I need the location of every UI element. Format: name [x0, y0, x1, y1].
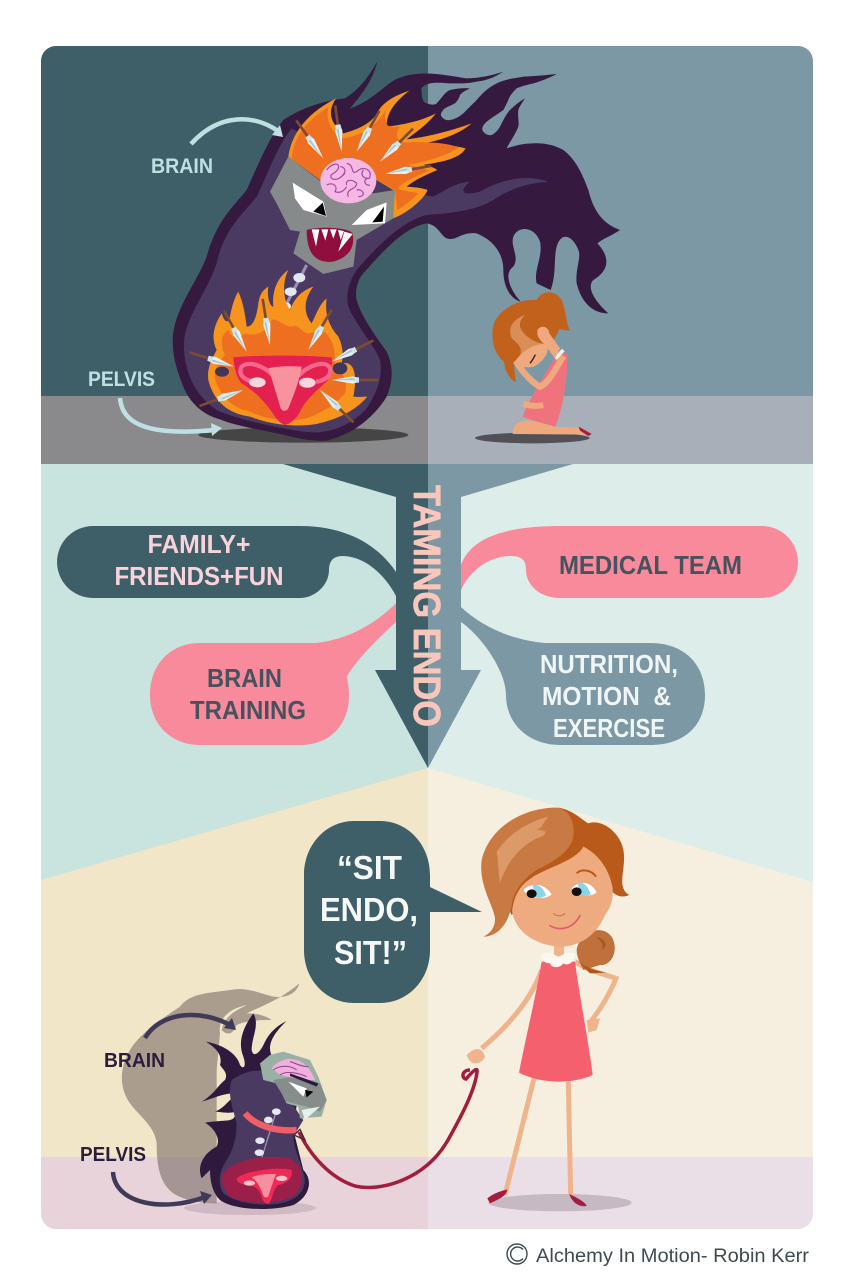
bubble: brain training: TRAINING [190, 695, 306, 725]
bubble: nutrition motion exercise: NUTRITION, [540, 649, 678, 679]
arrow: small brain [145, 1015, 236, 1038]
monster face [270, 157, 395, 274]
bubble: medical team: MEDICAL TEAM [559, 550, 742, 580]
top scene: flaming endo monster [173, 62, 620, 443]
nose [553, 913, 565, 916]
bubble: nutrition motion exercise: EXERCISE [553, 713, 665, 743]
ear and neck [537, 327, 560, 358]
kneeling girl [475, 292, 592, 443]
standing girl [467, 808, 632, 1211]
head jaw [273, 1077, 327, 1112]
shadow of small endo [184, 1201, 316, 1215]
hair dark [490, 808, 629, 915]
head skin [512, 847, 613, 947]
label arrow: brain [191, 119, 278, 144]
glowing uterus [222, 1157, 302, 1204]
sleeve collar [555, 350, 563, 359]
neck [554, 940, 564, 957]
pelvis fire [188, 270, 378, 426]
bubble: brain training [150, 603, 396, 745]
legs [505, 1078, 534, 1195]
monster brain [320, 158, 376, 203]
hair streak [497, 817, 548, 883]
dress [523, 354, 567, 427]
ghost shadow [122, 983, 299, 1203]
speech bubble: ENDO, [320, 891, 418, 928]
speech bubble [304, 821, 482, 1003]
hair [492, 292, 570, 382]
bubble: family friends fun: FRIENDS+FUN [114, 561, 284, 591]
label arrow: pelvis [120, 398, 215, 432]
clip on collar [294, 1129, 305, 1140]
hands [467, 1049, 485, 1063]
arrow head [211, 423, 222, 436]
arrow: small pelvis [113, 1172, 212, 1205]
eyebrow [577, 870, 596, 877]
copyright: Alchemy In Motion- Robin Kerr [536, 1246, 810, 1267]
closed eye [530, 355, 535, 363]
label: small brain: BRAIN [104, 1050, 165, 1072]
speech bubble: SIT!” [334, 934, 407, 971]
hair highlight [510, 315, 543, 363]
shadow [488, 1194, 632, 1211]
shoe [579, 427, 592, 436]
leash [299, 1070, 477, 1187]
speech bubble: “SIT [337, 849, 402, 886]
hair light [481, 808, 574, 937]
face [513, 344, 548, 367]
small brain [272, 1059, 318, 1087]
taming endo arrow [283, 464, 573, 768]
bubble: family friends fun [57, 526, 396, 598]
bubble: brain training: BRAIN [207, 663, 282, 693]
head [260, 1052, 327, 1118]
uterus [233, 356, 332, 425]
shoes [487, 1189, 507, 1203]
monster body [173, 62, 620, 441]
spine [255, 1108, 281, 1163]
spine [277, 265, 307, 357]
dress [519, 962, 593, 1082]
forearm and hand [517, 356, 563, 387]
bubble: medical team [461, 526, 798, 598]
small tamed endo [122, 983, 327, 1209]
bubble: family friends fun: FAMILY+ [148, 529, 250, 559]
head fire [288, 91, 472, 218]
mouth [550, 916, 580, 929]
eyes [523, 883, 597, 898]
arrow head [272, 125, 283, 137]
head group [481, 808, 629, 947]
label: brain: BRAIN [151, 155, 213, 178]
arrow title: TAMING ENDO [405, 485, 447, 727]
monster shadow [198, 427, 408, 443]
shadow [475, 433, 590, 443]
small eye [288, 1082, 320, 1120]
body flames [200, 1013, 309, 1209]
bubble: nutrition motion exercise [461, 607, 705, 745]
collar [245, 1113, 297, 1130]
kneeling legs [513, 421, 588, 435]
bubble: nutrition motion exercise: MOTION & [542, 681, 671, 711]
label: pelvis: PELVIS [88, 368, 155, 391]
dark hair band [507, 837, 583, 915]
body inner [220, 1071, 305, 1205]
monster inner body [184, 128, 548, 432]
collar [541, 952, 575, 967]
ponytail [575, 930, 615, 973]
arms [482, 970, 542, 1048]
label: small pelvis: PELVIS [80, 1144, 146, 1166]
